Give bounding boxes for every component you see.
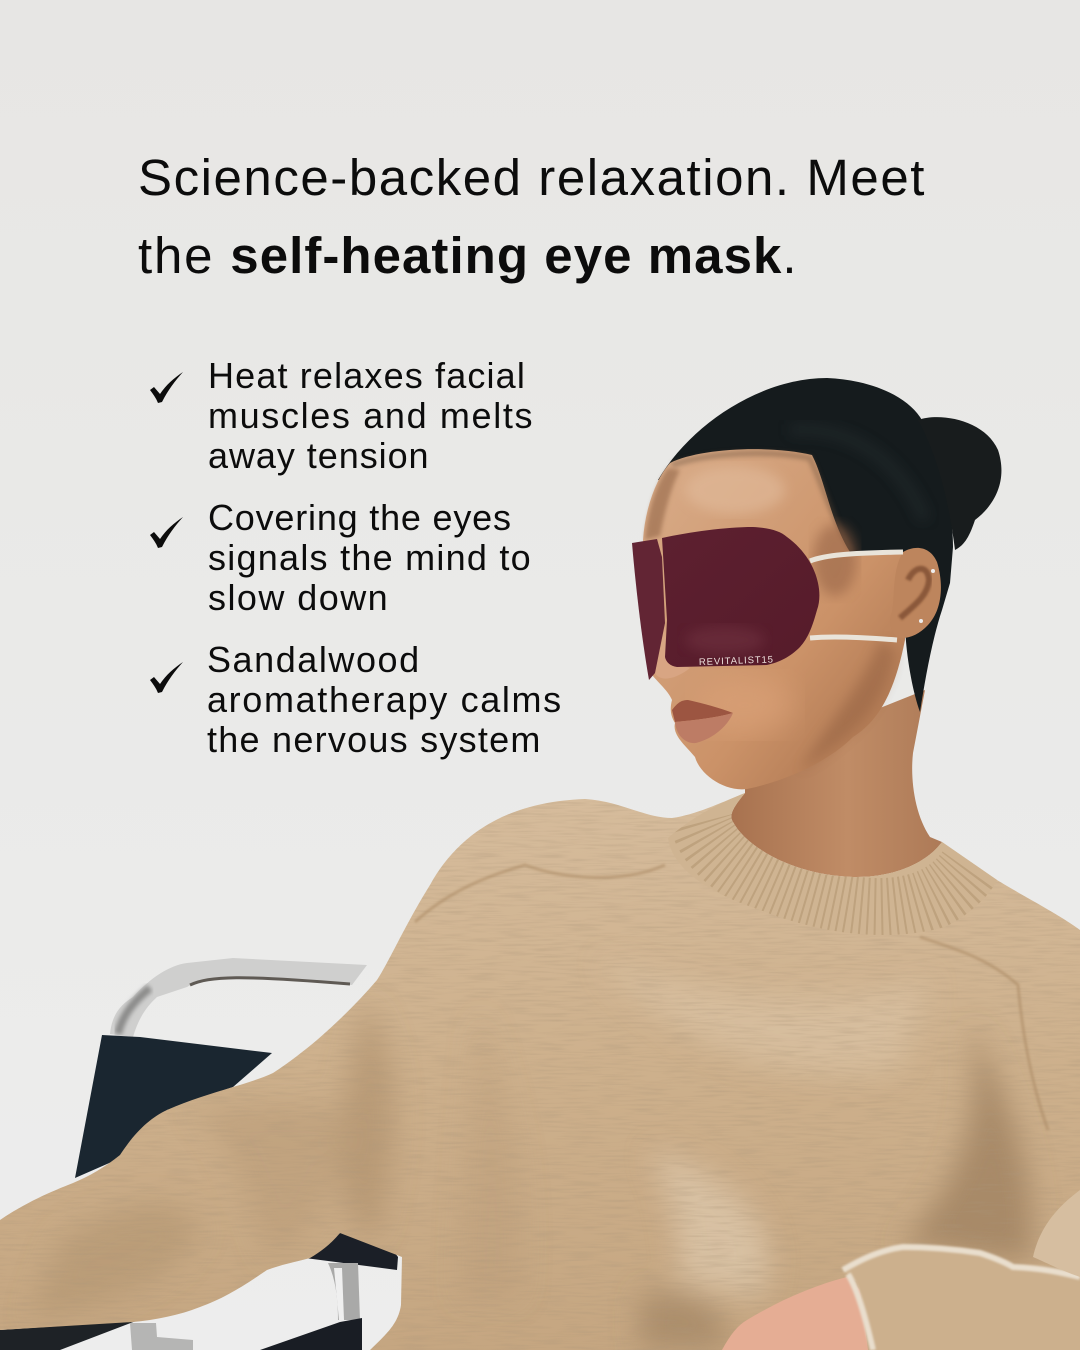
benefit 2 text (208, 497, 532, 618)
benefit 3 text: Sandalwood (207, 639, 421, 680)
hair sheen (790, 430, 925, 520)
benefit 1 text (208, 355, 534, 476)
sweater shading (30, 960, 1032, 1350)
sweater seams (415, 865, 1048, 1130)
temple shadow (813, 524, 857, 596)
heading: the self-heating eye mask. (138, 227, 797, 284)
benefit 3 text (207, 639, 563, 760)
lips (672, 700, 733, 743)
icon: check 1 (150, 372, 183, 403)
icon: check 3 (150, 662, 183, 693)
ear (890, 548, 941, 638)
chair (0, 958, 398, 1350)
mask main panel (662, 527, 819, 667)
mask highlight (685, 626, 765, 654)
nose (655, 625, 690, 679)
face (643, 449, 905, 789)
hand (722, 1277, 868, 1350)
benefit 1 text: muscles and melts (208, 395, 534, 436)
mask strap (810, 552, 903, 640)
right sleeve fold (1033, 1190, 1080, 1277)
sweater collar (668, 793, 997, 935)
eye mask (632, 527, 819, 680)
jaw shadow (800, 640, 895, 770)
benefit 2 text: Covering the eyes (208, 497, 512, 538)
benefits list (150, 355, 938, 814)
hair (658, 378, 1001, 712)
benefit 3 text: aromatherapy calms (207, 679, 563, 720)
icon: check 2 (150, 517, 183, 548)
benefit 2 text: signals the mind to (208, 537, 532, 578)
cheek highlight (695, 675, 795, 735)
mask brand text: REVITALIST15 (699, 654, 774, 668)
sweater (0, 372, 1080, 1350)
sweater knit texture (19, 802, 1080, 1303)
neck (731, 690, 942, 877)
hairline soft shadow (672, 453, 852, 552)
benefit 1 text: away tension (208, 435, 430, 476)
sweater cuff (843, 1247, 1080, 1350)
forehead side shadow (645, 468, 680, 540)
cuff light edge (843, 1247, 1080, 1350)
mask nose flap (632, 539, 665, 680)
hair bun (918, 417, 1001, 550)
benefit 1 text: Heat relaxes facial (208, 355, 526, 396)
heading: Science-backed relaxation. Meet (138, 149, 926, 206)
heading (138, 149, 926, 284)
photo illustration: woman wearing eye mask (0, 378, 1080, 1350)
forehead highlight (685, 466, 785, 514)
benefit 2 text: slow down (208, 577, 389, 618)
benefit 3 text: the nervous system (207, 719, 542, 760)
ear studs (931, 569, 935, 573)
